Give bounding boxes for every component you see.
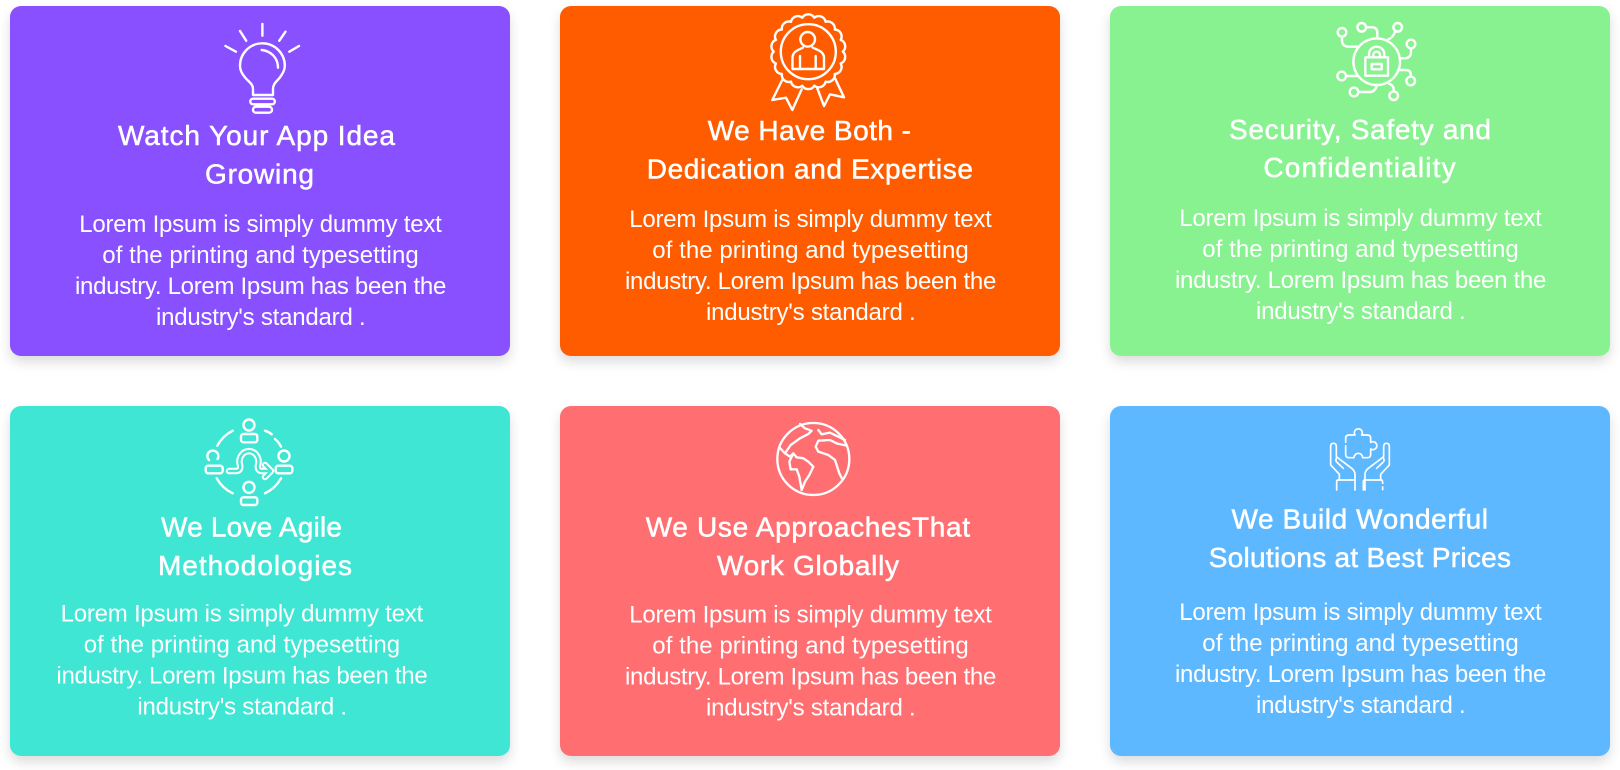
icon: circuit padlock xyxy=(1337,23,1415,100)
body text xyxy=(56,600,428,720)
panel: we love agile methodologies xyxy=(10,406,510,756)
body text: of the printing and typesetting xyxy=(1202,236,1519,263)
body text: industry's standard . xyxy=(1256,692,1466,719)
body text xyxy=(1175,599,1546,719)
icon: light bulb xyxy=(226,24,299,113)
heading: dedication and expertise: Dedication and Expertise xyxy=(647,153,973,184)
heading: watch your app idea growing: Growing xyxy=(205,158,314,190)
body text: Lorem Ipsum is simply dummy text xyxy=(629,206,992,233)
body text: industry. Lorem Ipsum has been the xyxy=(56,662,428,690)
heading: wonderful solutions at best prices: Solutions at Best Prices xyxy=(1209,542,1511,573)
body text: of the printing and typesetting xyxy=(652,237,969,264)
body text: of the printing and typesetting xyxy=(84,632,400,658)
heading: approaches that work globally xyxy=(646,512,970,581)
heading: we love agile methodologies: Methodologies xyxy=(158,550,352,581)
icon: globe xyxy=(777,423,849,495)
body text: Lorem Ipsum is simply dummy text xyxy=(1179,599,1542,626)
heading: security, safety and confidentiality: Security, Safety and xyxy=(1229,114,1491,145)
panel: watch your app idea growing xyxy=(10,6,510,356)
heading: we love agile methodologies xyxy=(158,512,352,581)
body text xyxy=(625,206,996,326)
icon: hands holding puzzle piece xyxy=(1331,429,1389,490)
body text: industry's standard . xyxy=(706,299,916,326)
heading: dedication and expertise xyxy=(647,115,973,184)
heading: we love agile methodologies: We Love Agile xyxy=(161,512,342,542)
body text: of the printing and typesetting xyxy=(652,632,969,660)
heading: wonderful solutions at best prices: We Build Wonderful xyxy=(1232,504,1488,535)
icon: award badge with person xyxy=(771,14,845,110)
body text: industry. Lorem Ipsum has been the xyxy=(625,268,996,295)
body text: industry's standard . xyxy=(706,694,916,722)
heading: approaches that work globally: We Use ApproachesThat xyxy=(646,512,970,542)
panel: approaches that work globally xyxy=(560,406,1060,756)
body text: industry. Lorem Ipsum has been the xyxy=(1175,267,1546,294)
body text: Lorem Ipsum is simply dummy text xyxy=(79,211,442,238)
panel: security, safety and confidentiality xyxy=(1110,6,1610,356)
panel: wonderful solutions at best prices xyxy=(1110,406,1610,756)
heading: watch your app idea growing: Watch Your App Idea xyxy=(118,120,395,151)
heading: watch your app idea growing xyxy=(118,120,395,190)
panel: dedication and expertise xyxy=(560,6,1060,356)
heading: dedication and expertise: We Have Both - xyxy=(708,115,911,146)
body text: Lorem Ipsum is simply dummy text xyxy=(629,602,992,628)
body text: industry's standard . xyxy=(137,694,347,720)
body text xyxy=(1175,205,1546,325)
heading: security, safety and confidentiality xyxy=(1229,114,1491,183)
body text: industry's standard . xyxy=(1256,298,1466,325)
body text: of the printing and typesetting xyxy=(1202,630,1519,657)
heading: wonderful solutions at best prices xyxy=(1209,504,1511,573)
body text xyxy=(75,211,446,331)
body text: industry. Lorem Ipsum has been the xyxy=(625,664,996,690)
body text: of the printing and typesetting xyxy=(102,242,419,269)
body text: Lorem Ipsum is simply dummy text xyxy=(61,600,424,628)
body text: industry's standard . xyxy=(156,304,366,331)
body text xyxy=(625,602,996,722)
body text: industry. Lorem Ipsum has been the xyxy=(1175,661,1546,688)
body text: Lorem Ipsum is simply dummy text xyxy=(1179,205,1542,232)
body text: industry. Lorem Ipsum has been the xyxy=(75,273,446,300)
heading: security, safety and confidentiality: Confidentiality xyxy=(1263,152,1456,183)
heading: approaches that work globally: Work Globally xyxy=(717,550,899,581)
icon: agile team cycle xyxy=(206,420,292,505)
